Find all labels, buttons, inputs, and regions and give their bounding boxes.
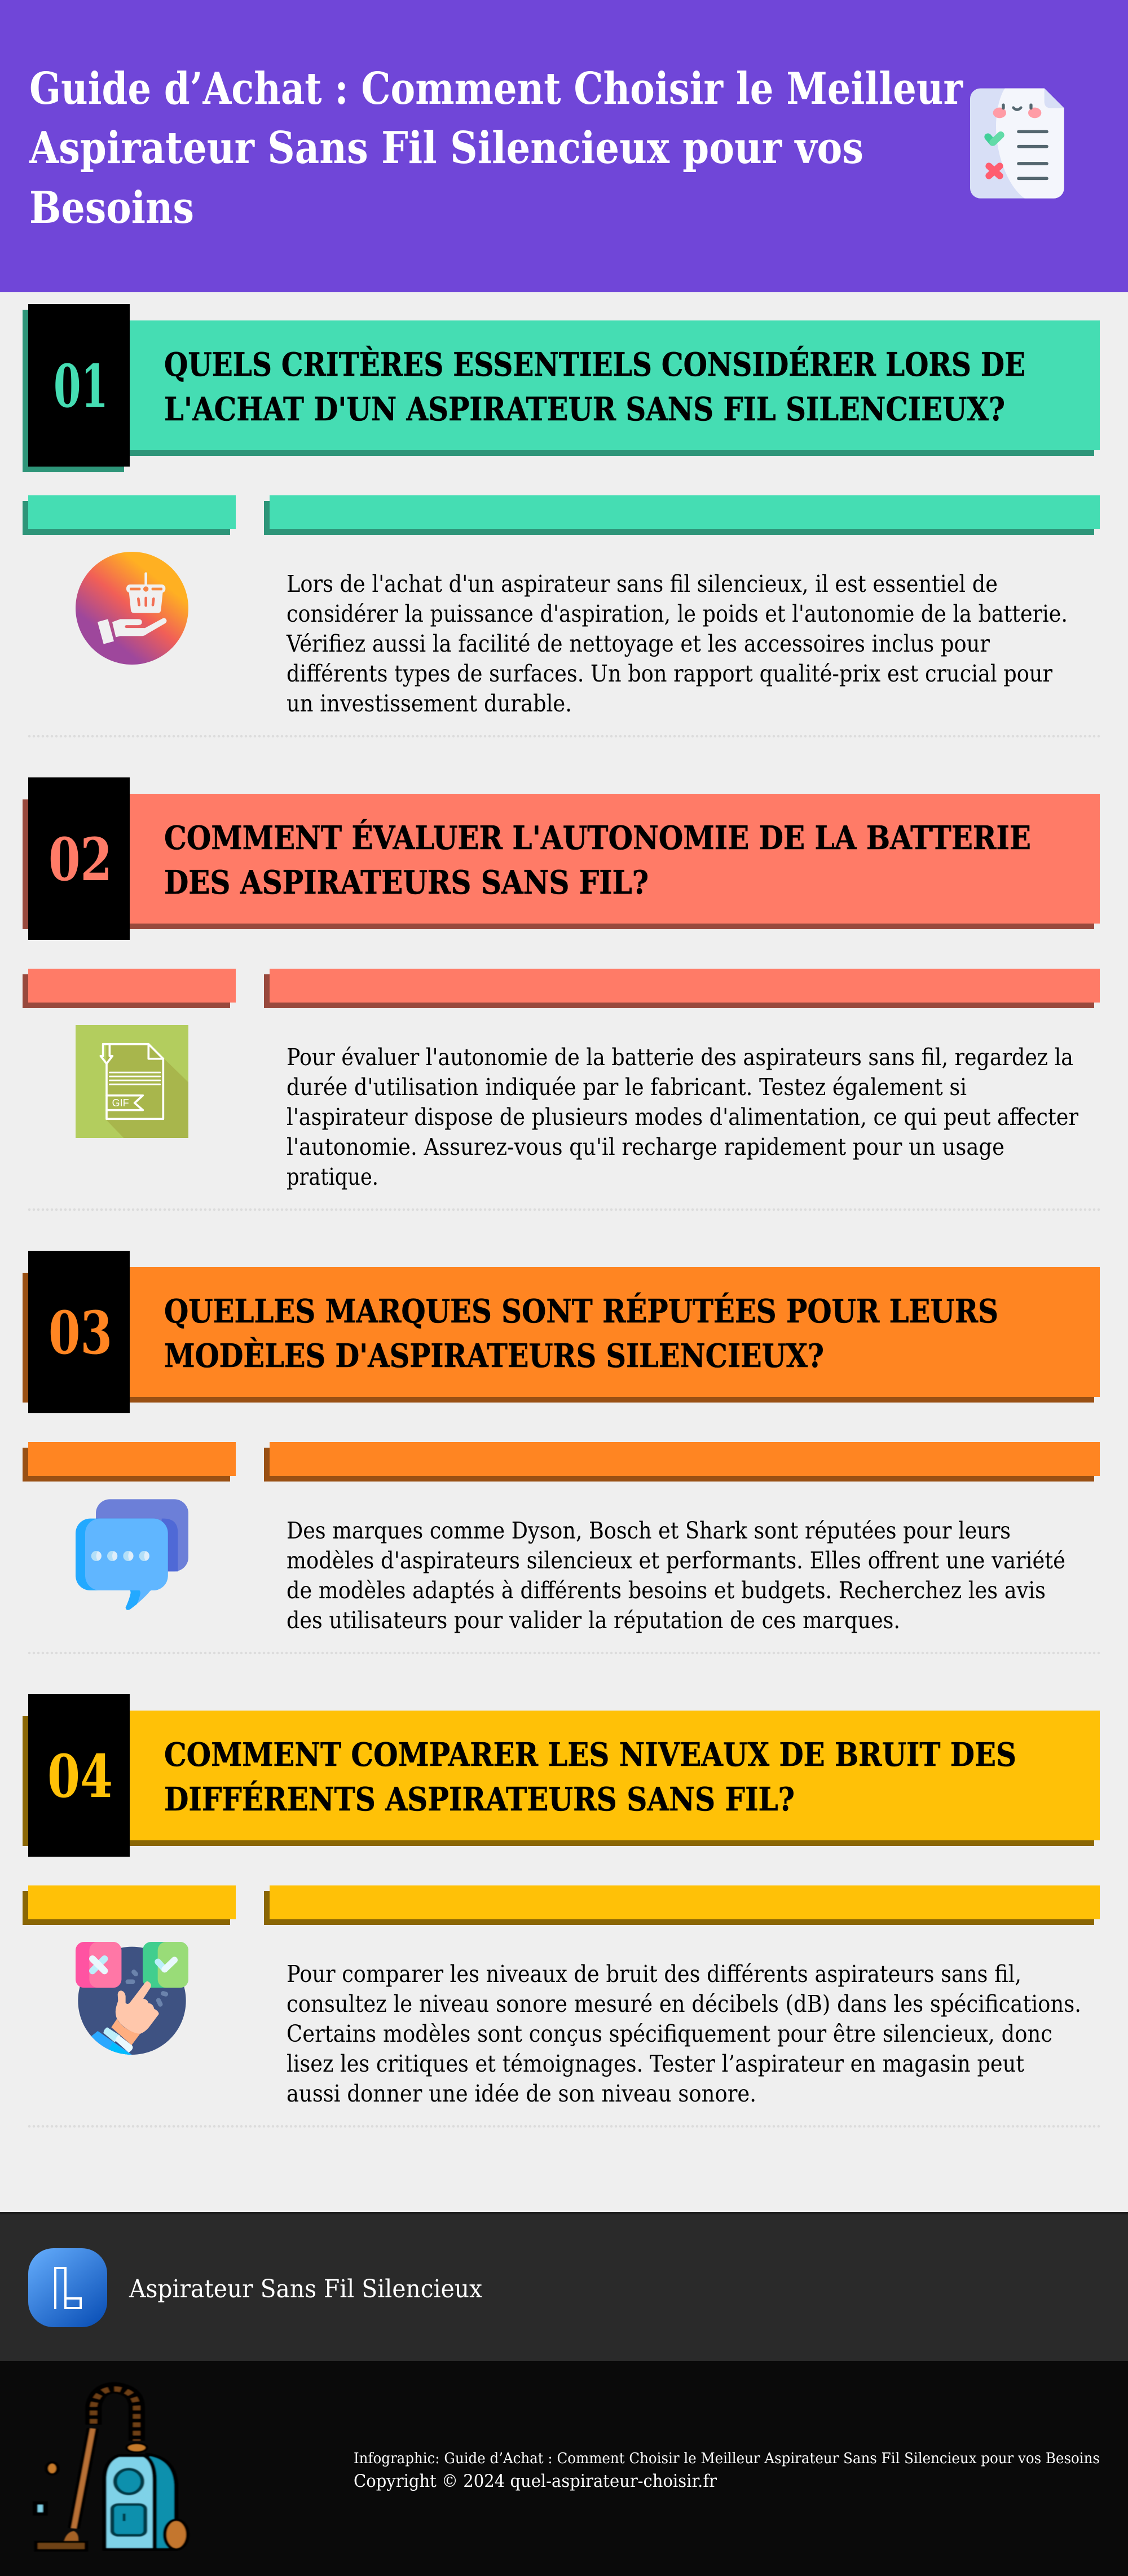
- icon: checklist document: [970, 89, 1064, 199]
- text block 03: modèles d'aspirateurs silencieux et performants. Elles offrent une variété: [287, 1547, 1065, 1574]
- title: Aspirateur Sans Fil Silencieux pour vos: [29, 122, 863, 174]
- heading 03: [164, 1292, 998, 1375]
- text block 03: de modèles adaptés à différents besoins et budgets. Recherchez les avis: [287, 1577, 1046, 1604]
- credit line: Infographic: Guide d’Achat : Comment Choisir le Meilleur Aspirateur Sans Fil Silencieux pour vos Besoins: [354, 2450, 1100, 2467]
- text block 04: Pour comparer les niveaux de bruit des différents aspirateurs sans fil,: [287, 1960, 1021, 1988]
- heading 01: [164, 345, 1025, 428]
- heading 02: COMMENT ÉVALUER L'AUTONOMIE DE LA BATTERIE: [164, 819, 1031, 857]
- icon: hand choosing cross or check: [76, 1942, 188, 2059]
- header banner: [0, 0, 1128, 292]
- text block 02: [287, 1044, 1078, 1190]
- text block 01: un investissement durable.: [287, 690, 572, 717]
- heading 04: [164, 1736, 1016, 1818]
- text block 04: aussi donner une idée de son niveau sonore.: [287, 2080, 756, 2107]
- text block 04: lisez les critiques et témoignages. Tester l’aspirateur en magasin peut: [287, 2050, 1024, 2077]
- heading 04: COMMENT COMPARER LES NIVEAUX DE BRUIT DES: [164, 1736, 1016, 1774]
- banner 02: [23, 777, 1100, 940]
- text block 04: [287, 1960, 1081, 2107]
- number 01: 01: [54, 351, 108, 421]
- text block 02: pratique.: [287, 1163, 378, 1190]
- copyright line: Copyright © 2024 quel-aspirateur-choisir.fr: [354, 2471, 717, 2491]
- sub bars 01: [23, 495, 1100, 535]
- text block 03: des utilisateurs pour valider la réputation de ces marques.: [287, 1607, 900, 1634]
- banner 04: [23, 1694, 1100, 1857]
- heading 03: MODÈLES D'ASPIRATEURS SILENCIEUX?: [164, 1337, 824, 1375]
- panel: section 03: [23, 1251, 1100, 1653]
- banner 01: [23, 304, 1100, 472]
- title: Guide d’Achat : Comment Choisir le Meilleur: [29, 63, 963, 115]
- icon: GIF file: [76, 1025, 188, 1138]
- text block 01: différents types de surfaces. Un bon rapport qualité-prix est crucial pour: [287, 660, 1052, 687]
- text block 01: Vérifiez aussi la facilité de nettoyage et les accessoires inclus pour: [286, 630, 990, 657]
- icon: brand logo: [28, 2248, 107, 2327]
- heading 02: [164, 819, 1031, 902]
- footer band: credits: [0, 2361, 1128, 2576]
- number 02: 02: [49, 825, 112, 894]
- sub bars 02: [23, 969, 1100, 1008]
- panel: section 04: [23, 1694, 1100, 2126]
- text block 02: l'autonomie. Assurez-vous qu'il recharge rapidement pour un usage: [287, 1133, 1004, 1160]
- sub bars 03: [23, 1442, 1100, 1482]
- text block 01: Lors de l'achat d'un aspirateur sans fil silencieux, il est essentiel de: [287, 570, 998, 597]
- text block 01: [286, 570, 1068, 717]
- heading 02: DES ASPIRATEURS SANS FIL?: [164, 864, 649, 902]
- text block 03: Des marques comme Dyson, Bosch et Shark sont réputées pour leurs: [287, 1517, 1011, 1544]
- text block 03: [287, 1517, 1065, 1634]
- icon: GIF file: GIF: [112, 1097, 129, 1109]
- panel: section 01: [23, 304, 1100, 736]
- icon: chat bubbles: [76, 1499, 188, 1610]
- number 03: 03: [49, 1298, 112, 1368]
- text block 02: durée d'utilisation indiquée par le fabricant. Testez également si: [287, 1074, 967, 1101]
- heading 01: L'ACHAT D'UN ASPIRATEUR SANS FIL SILENCIEUX?: [164, 390, 1005, 428]
- heading 04: DIFFÉRENTS ASPIRATEURS SANS FIL?: [164, 1780, 795, 1818]
- icon: vacuum cleaner: [34, 2388, 188, 2552]
- number 04: 04: [47, 1742, 113, 1811]
- title: [29, 63, 963, 234]
- brand name: Aspirateur Sans Fil Silencieux: [129, 2275, 482, 2304]
- heading 03: QUELLES MARQUES SONT RÉPUTÉES POUR LEURS: [164, 1292, 998, 1330]
- footer band: brand: [0, 2212, 1128, 2361]
- panel: section 02: [23, 777, 1100, 1210]
- sub bars 04: [23, 1885, 1100, 1925]
- title: Besoins: [29, 182, 194, 234]
- banner 03: [23, 1251, 1100, 1413]
- text block 04: Certains modèles sont conçus spécifiquement pour être silencieux, donc: [287, 2020, 1052, 2047]
- icon: basket in hand: [76, 552, 188, 665]
